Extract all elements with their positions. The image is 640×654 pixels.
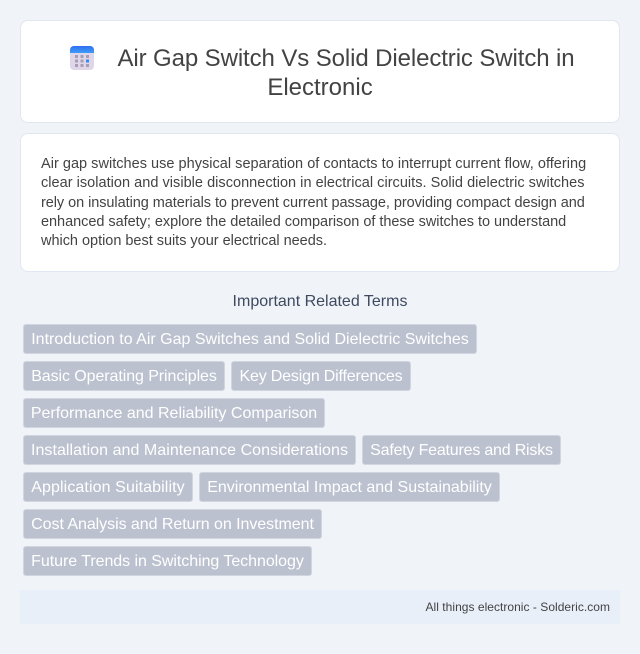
intro text: Air gap switches use physical separation of contacts to interrupt current flow, offering	[41, 156, 586, 172]
tag: Introduction to Air Gap Switches and Solid Dielectric Switches	[31, 331, 469, 348]
tag	[23, 361, 225, 391]
intro text: enhanced safety; explore the detailed comparison of these switches to understand	[41, 214, 566, 230]
intro text: which option best suits your electrical needs.	[41, 233, 327, 249]
tag: Environmental Impact and Sustainability	[207, 479, 492, 496]
intro text	[41, 156, 586, 249]
tag	[23, 546, 312, 576]
title	[117, 45, 575, 101]
section heading: Important Related Terms	[233, 293, 407, 310]
tag	[23, 509, 322, 539]
header panel	[20, 20, 620, 123]
tag: Application Suitability	[31, 479, 185, 496]
intro text: clear isolation and visible disconnection in electrical circuits. Solid dielectric switches	[41, 175, 584, 191]
footer	[20, 590, 620, 624]
title: Electronic	[267, 74, 373, 101]
tag: Key Design Differences	[240, 368, 402, 385]
icon: calendar	[70, 46, 94, 70]
tag: Installation and Maintenance Considerations	[31, 442, 348, 459]
title: Air Gap Switch Vs Solid Dielectric Switch in	[117, 45, 575, 72]
tag	[231, 361, 411, 391]
tag	[23, 435, 356, 465]
tag	[23, 324, 477, 354]
tag: Safety Features and Risks	[370, 442, 553, 459]
related terms tags	[23, 324, 561, 576]
tag: Performance and Reliability Comparison	[31, 405, 317, 422]
intro panel	[20, 133, 620, 272]
tag: Basic Operating Principles	[31, 368, 217, 385]
tag	[362, 435, 561, 465]
intro text: rely on insulating materials to prevent current passage, providing compact design and	[41, 195, 585, 211]
tag	[23, 472, 193, 502]
footer credit: All things electronic - Solderic.com	[426, 600, 610, 614]
tag	[199, 472, 500, 502]
tag: Future Trends in Switching Technology	[31, 553, 304, 570]
tag	[23, 398, 325, 428]
tag: Cost Analysis and Return on Investment	[31, 516, 314, 533]
